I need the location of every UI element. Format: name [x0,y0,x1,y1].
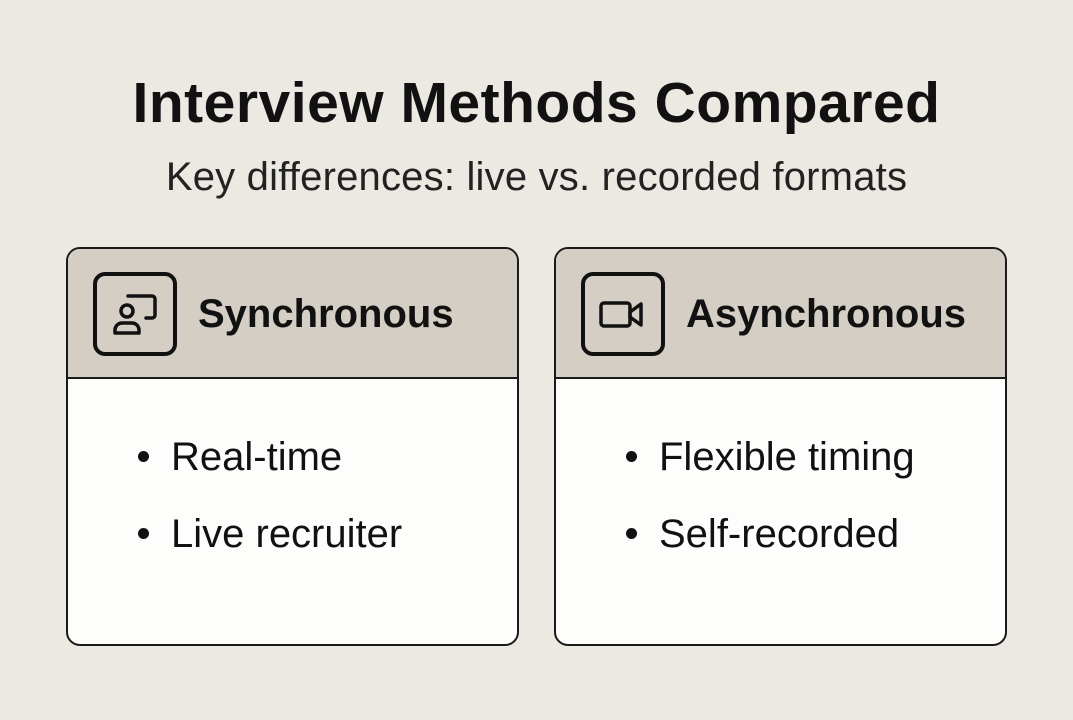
icon: video camera [581,272,665,356]
list: asynchronous [626,435,915,556]
list: synchronous [138,435,402,556]
heading: Asynchronous: Asynchronous [686,292,966,336]
heading: Synchronous: Synchronous [198,292,454,336]
header: synchronous [68,249,517,379]
icon: person with screen [93,272,177,356]
panel: asynchronous: Self-recorded [659,512,899,556]
panel: synchronous: Real-time [171,435,342,479]
panel: asynchronous: Flexible timing [659,435,915,479]
subtitle: Key differences: live vs. recorded formats [166,155,907,199]
panel: synchronous: Live recruiter [171,512,402,556]
header: asynchronous [556,249,1005,379]
panel: synchronous [66,247,519,646]
title: Interview Methods Compared [133,71,940,135]
panel: asynchronous [554,247,1007,646]
